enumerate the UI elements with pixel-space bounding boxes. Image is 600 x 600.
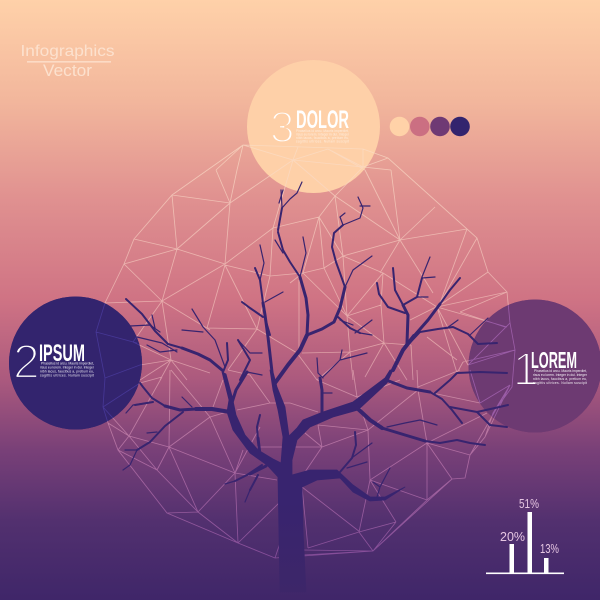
color palette swatches [390,117,470,136]
text block: 3 DOLOR: risus eu lorem. Integer in dui. Integer [296,132,350,136]
bar chart [486,496,564,574]
tree silhouette [123,182,508,592]
title: Infographics Vector [20,43,114,80]
text block: 2 IPSUM: risus eu lorem. Integer in dui. Integer [40,366,95,370]
text block: 2 IPSUM [13,336,95,389]
panel: 2 IPSUM circle [9,296,142,430]
text block: 2 IPSUM: IPSUM [39,340,85,367]
title: Infographics Vector: Infographics [20,43,114,60]
bar chart: 51% [519,496,539,511]
text block: 2 IPSUM: Phasellus id arcu. Mauris imperdiet, [41,362,94,366]
text block: 3 DOLOR: 3 [270,103,294,152]
title: Infographics Vector: Vector [43,62,93,80]
text block: 1 LOREM: nibh lacus, faucibus a, pretium eu, [533,377,587,381]
text block: 2 IPSUM: sagittis ultrices. Nullam suscipit [40,374,94,378]
text block: 1 LOREM: Phasellus id arcu. Mauris imperdiet, [534,369,587,373]
text block: 3 DOLOR: nibh lacus, faucibus a, pretium eu, [296,136,349,140]
bar chart: 13% [540,541,559,556]
text block: 3 DOLOR [270,103,350,152]
text block: 3 DOLOR: DOLOR [296,106,349,134]
text block: 1 LOREM: risus eu lorem. Integer in dui. Integer [533,373,588,377]
text block: 3 DOLOR: sagittis ultrices. Nullam suscipit [296,140,349,144]
text block: 1 LOREM: 1 [513,343,539,395]
text block: 3 DOLOR: Phasellus id arcu. Mauris imperdiet, [296,129,349,133]
trunk and main limbs [222,370,405,592]
text block: 1 LOREM [513,343,588,395]
text block: 2 IPSUM: nibh lacus, faucibus a, pretium eu, [40,370,94,374]
text block: 2 IPSUM: 2 [13,336,40,389]
panel: 1 LOREM circle [468,300,600,432]
panel: 3 DOLOR circle [247,60,380,193]
text block: 1 LOREM: sagittis ultrices. Nullam suscipit [533,381,587,385]
bar chart: 20% [500,529,525,544]
polygon mesh sphere [9,145,600,558]
